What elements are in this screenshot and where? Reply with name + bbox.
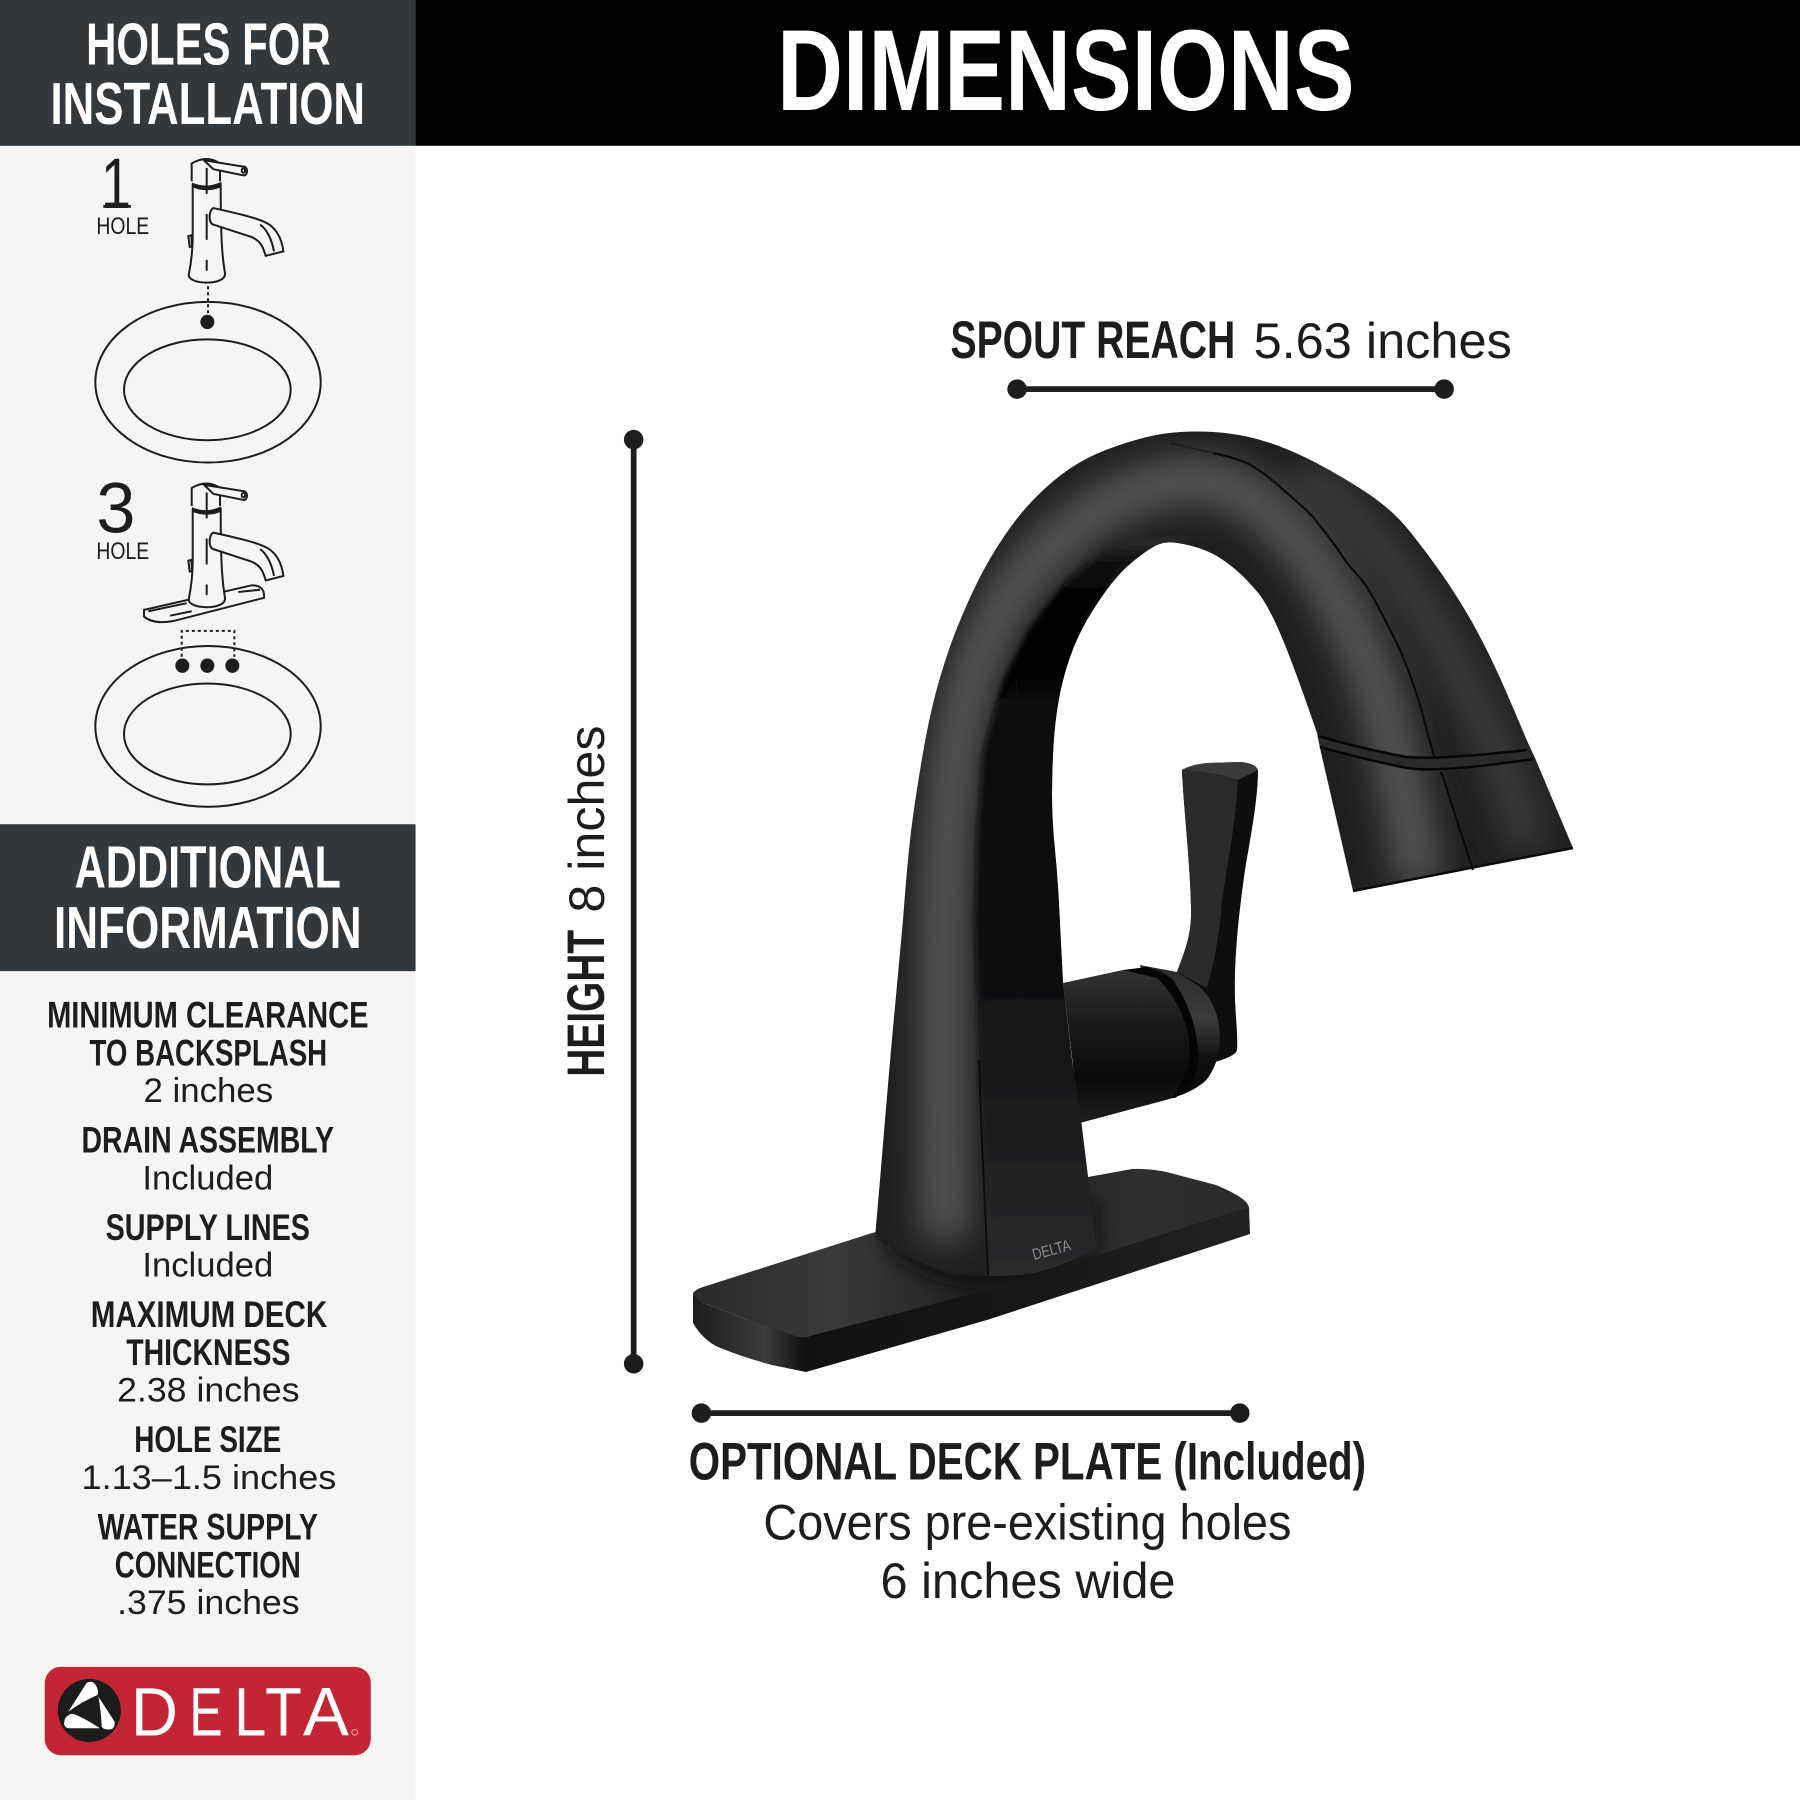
arrow: spout reach bar bbox=[1007, 379, 1454, 399]
logo: delta: L bbox=[234, 1673, 266, 1750]
spout ridge faint start bbox=[1170, 443, 1213, 453]
spec: drain assembly: Included bbox=[142, 1159, 273, 1197]
faucet photo bbox=[693, 431, 1573, 1372]
logo: delta: A bbox=[303, 1673, 349, 1750]
label: 1 hole: 1 bbox=[101, 145, 131, 224]
body soft highlight bbox=[943, 480, 1420, 1240]
heading: holes for installation bbox=[0, 0, 416, 146]
mixer collar bbox=[1140, 965, 1220, 1097]
spec: hole size bbox=[82, 1419, 336, 1497]
spout right side highlight bbox=[1300, 470, 1530, 850]
logo: delta: D bbox=[131, 1673, 178, 1750]
mixer collar ring bbox=[1123, 967, 1198, 1098]
spec: drain assembly: DRAIN ASSEMBLY bbox=[82, 1120, 334, 1161]
heading: additional information: ADDITIONAL bbox=[75, 833, 341, 900]
spec: minimum clearance: TO BACKSPLASH bbox=[90, 1032, 327, 1073]
label: spout reach value: 5.63 inches bbox=[1254, 312, 1512, 369]
spec: maximum deck thickness: MAXIMUM DECK bbox=[91, 1294, 328, 1335]
spec: minimum clearance bbox=[47, 994, 368, 1110]
spout ridge line bbox=[1213, 453, 1473, 870]
label: spout reach value bbox=[951, 311, 1512, 370]
heading: holes for installation: HOLES FOR bbox=[86, 10, 331, 77]
icon: single hole faucet and sink bbox=[95, 159, 321, 463]
heading: additional information: INFORMATION bbox=[54, 894, 362, 961]
text: deck plate description bbox=[689, 1433, 1366, 1609]
mixer lever bbox=[1170, 762, 1258, 1062]
text: deck plate description: Covers pre-existing holes bbox=[763, 1493, 1291, 1550]
text: deck plate description: OPTIONAL DECK PLATE (Included) bbox=[689, 1433, 1366, 1492]
heading: additional information bbox=[0, 824, 416, 971]
spec: maximum deck thickness bbox=[91, 1294, 328, 1410]
spec list bbox=[47, 994, 368, 1622]
spec: water supply connection: WATER SUPPLY bbox=[98, 1506, 318, 1547]
label: 1 hole bbox=[96, 145, 149, 240]
spec: supply lines: Included bbox=[142, 1247, 273, 1285]
label: spout reach value: SPOUT REACH bbox=[951, 311, 1235, 370]
faucet brand mark: DELTA bbox=[1031, 1237, 1073, 1264]
spec: maximum deck thickness: THICKNESS bbox=[126, 1332, 290, 1373]
dimension: spout reach bbox=[951, 311, 1512, 399]
spec: drain assembly bbox=[82, 1120, 334, 1197]
spec: maximum deck thickness: 2.38 inches bbox=[117, 1372, 300, 1410]
label: height value: 8 inches bbox=[558, 726, 615, 913]
spec: supply lines: SUPPLY LINES bbox=[106, 1207, 310, 1248]
spec: water supply connection: .375 inches bbox=[117, 1584, 300, 1622]
one hole installation diagram bbox=[95, 145, 321, 463]
spec: supply lines bbox=[106, 1207, 310, 1285]
spec: water supply connection bbox=[98, 1506, 318, 1622]
body base ridge bbox=[979, 1060, 988, 1275]
logo: delta: T bbox=[265, 1673, 302, 1750]
spec: hole size: HOLE SIZE bbox=[134, 1419, 281, 1460]
logo: delta bbox=[45, 1667, 371, 1755]
inner shaded band bbox=[975, 538, 1190, 1280]
text: deck plate description: 6 inches wide bbox=[880, 1552, 1176, 1609]
arrow: height bar bbox=[624, 430, 643, 1374]
faucet body and spout bbox=[875, 431, 1573, 1280]
dimension: height bbox=[557, 430, 643, 1374]
heading: holes for installation: INSTALLATION bbox=[51, 70, 365, 137]
dimension: deck plate bbox=[689, 1403, 1366, 1609]
label: 3 hole: HOLE bbox=[96, 538, 149, 565]
spec: minimum clearance: MINIMUM CLEARANCE bbox=[47, 994, 368, 1035]
spray head seam bbox=[1320, 738, 1531, 772]
logo: delta: E bbox=[189, 1673, 223, 1750]
label: 1 hole: HOLE bbox=[96, 213, 149, 240]
three hole installation diagram bbox=[95, 470, 321, 807]
spec: hole size: 1.13–1.5 inches bbox=[82, 1459, 336, 1497]
icon: three hole faucet with plate and sink bbox=[95, 484, 321, 807]
deck plate bbox=[693, 1169, 1250, 1372]
arrow: deck plate bar bbox=[692, 1403, 1250, 1423]
left sidebar background bbox=[0, 0, 416, 1800]
label: 3 hole bbox=[96, 470, 149, 565]
spec: water supply connection: CONNECTION bbox=[115, 1544, 301, 1585]
label: height value: HEIGHT bbox=[557, 930, 616, 1077]
mixer cylinder bbox=[1063, 970, 1189, 1123]
spec: minimum clearance: 2 inches bbox=[143, 1072, 273, 1110]
title banner: dimensions bbox=[416, 0, 1800, 146]
spray head bottom edge bbox=[1353, 848, 1573, 891]
label: 3 hole: 3 bbox=[96, 470, 135, 549]
title banner: dimensions: DIMENSIONS bbox=[777, 7, 1355, 135]
label: height value bbox=[557, 726, 616, 1077]
